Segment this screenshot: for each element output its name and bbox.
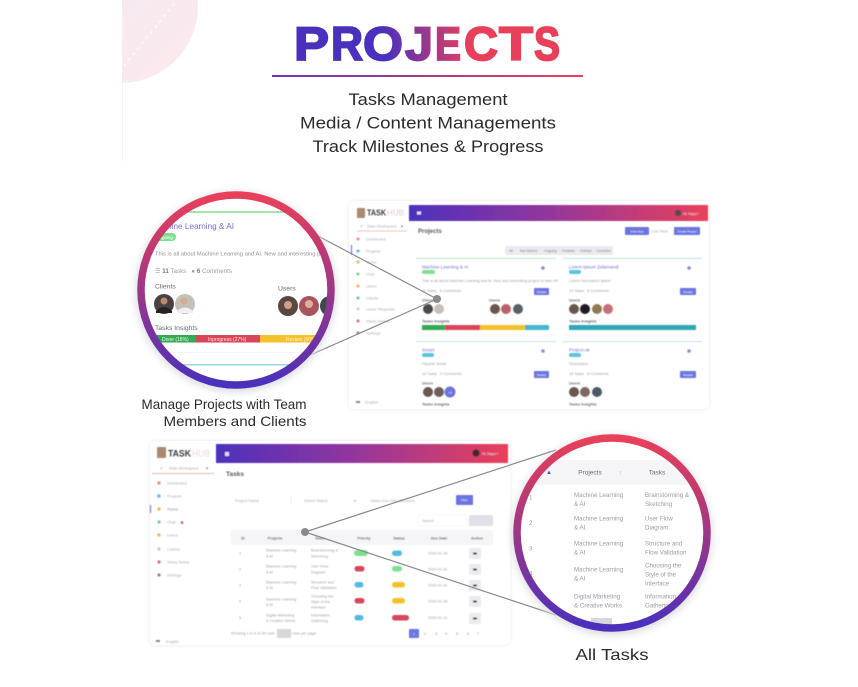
status filter tabs: Canceled (596, 249, 610, 253)
caption: manage projects: Manage Projects with Team (142, 396, 306, 412)
project card: machine learning (416, 258, 558, 336)
caption: manage projects: Members and Clients (164, 413, 306, 429)
tasks insights bar: Review (50%) (286, 337, 317, 343)
tasks table: Machine Learning (266, 548, 296, 552)
tasks sidebar: Main Workspace (169, 466, 199, 470)
project card: machine learning: 11 Tasks 6 Comments (422, 289, 461, 293)
project card: smart: Flipside Smart (422, 362, 447, 366)
tasks table: Status (393, 536, 405, 540)
project card: lorem ipsum: Lorem Description lipbon (569, 279, 611, 283)
tasks table: 3 (239, 584, 241, 588)
zoomed table header: ▲ (546, 470, 552, 476)
projects sidebar: Clients (366, 296, 378, 300)
tasks sidebar: Sticky Notes (167, 560, 189, 564)
subtitle (300, 90, 556, 156)
project card: smart: Tasks Insights (422, 402, 450, 406)
view buttons: List View (652, 228, 668, 234)
tasks table: Sketching (311, 554, 328, 558)
tasks table: & AI (266, 570, 273, 574)
project card: lorem ipsum: Tasks Insights (569, 318, 597, 324)
title: O (363, 17, 403, 70)
tasks table: & Creative Works (266, 619, 296, 623)
tasks table: Machine Learning (266, 580, 296, 584)
tasks top header bar: Hi, Nape ! (482, 452, 498, 456)
table pagination: 5 (456, 632, 458, 636)
tasks table: Priority (357, 536, 372, 540)
project card: lorem ipsum (563, 258, 702, 336)
clients group (154, 284, 195, 314)
tasks sidebar: Dashboard (167, 480, 187, 486)
tasks table: Tasks (315, 536, 325, 540)
zoomed table rows: Flow Validation (645, 550, 687, 556)
subtitle: Tasks Management (348, 90, 508, 109)
project card: lorem ipsum: Details (683, 290, 693, 294)
projects sidebar: Sticky Notes (366, 318, 388, 324)
projects page heading: Projects (418, 229, 442, 235)
projects top header bar: Hi, Naps ! (683, 212, 699, 216)
zoomed table rows: & AI (574, 550, 586, 556)
tasks sidebar: HUB (192, 448, 210, 458)
tasks table: Machine Learning (266, 598, 296, 602)
project card: machine learning: Tasks Insights (422, 318, 450, 324)
tasks insights bar: Done (18%) (162, 337, 189, 343)
tasks table (231, 530, 493, 624)
zoomed table rows: 1 (529, 494, 533, 502)
zoomed table rows: Choosing the (645, 562, 682, 570)
zoomed table header: Tasks (649, 470, 666, 476)
tasks table: 4 (239, 600, 241, 604)
table pagination: Showing 1 to 5 of 35 rows (231, 632, 275, 636)
table search and tools: Search (422, 519, 434, 523)
title: S (534, 17, 560, 70)
clients group: Clients (155, 284, 176, 290)
connector lines to magnifier: projects (308, 236, 441, 356)
task filters: Select Status (304, 498, 328, 503)
tasks sidebar: TASK (168, 448, 191, 458)
project card: project ok: Details (683, 373, 693, 377)
projects sidebar: Chat (366, 272, 375, 276)
table pagination: 7 (477, 632, 479, 636)
zoomed table header (535, 460, 689, 485)
project card: project ok (563, 341, 702, 406)
tasks table: Style of the (311, 600, 330, 604)
card title: Machine Learning & AI (152, 222, 234, 231)
zoomed table rows: Machine Learning (574, 516, 624, 522)
zoomed table rows: & AI (574, 501, 586, 508)
tasks table: Digital Marketing (266, 614, 294, 618)
tasks table: 2020-01-31 (428, 568, 447, 572)
project card: project ok: Tasks Insights (569, 402, 597, 406)
task filters: ▾ (354, 498, 356, 503)
status filter tabs: Not Started (520, 249, 537, 253)
tasks table: Information (311, 614, 330, 618)
zoomed table rows: 2 (529, 520, 533, 527)
tasks page heading: Tasks (226, 471, 244, 478)
tasks table: Interface (311, 606, 326, 610)
tasks table: & AI (266, 603, 273, 607)
zoomed table rows: Brainstorming & (645, 492, 690, 499)
tasks table: ID (241, 536, 245, 540)
users group (278, 286, 327, 316)
users group: Users (278, 286, 296, 292)
projects sidebar: HUB (387, 208, 404, 218)
table pagination: 2 (424, 632, 426, 636)
magnifier: project card detail (136, 192, 362, 392)
title: P (294, 17, 329, 70)
table pagination: 6 (467, 632, 469, 636)
project card: machine learning: This is all about Machine Learning and AI. New and interesting project to start off (422, 279, 558, 283)
zoomed table header: ↕ (619, 470, 622, 476)
project card: machine learning: Details (537, 290, 547, 294)
projects sidebar: Tasks (366, 260, 376, 264)
magnifier: project card detail: Ongoing (156, 235, 174, 240)
projects top header bar (409, 205, 708, 221)
tasks top header bar (216, 444, 508, 463)
tasks table: User Flow (311, 564, 328, 568)
status filter tabs: All (509, 249, 513, 253)
zoomed table rows: Diagram (645, 524, 668, 532)
tasks table: Diagram (311, 570, 325, 574)
zoomed table rows: Style of the (645, 572, 677, 578)
tasks table: Choosing the (311, 594, 333, 598)
task and comment counts: ☰ 11 Tasks ● 6 Comments (155, 268, 232, 275)
title underline (272, 75, 583, 77)
tasks table: Flow Validation (311, 586, 336, 590)
tasks table: Due Date (431, 536, 447, 540)
tasks sidebar (150, 447, 214, 644)
task filters: Tasks Due Date Between (370, 498, 415, 503)
projects sidebar: ✓ (360, 224, 363, 228)
projects sidebar: Users (366, 284, 376, 288)
tasks sidebar: ✓ (160, 466, 163, 470)
view buttons: Grid View (631, 230, 644, 234)
table pagination: 4 (445, 632, 447, 636)
zoomed table rows (529, 492, 690, 610)
tasks table: Brainstorming & (311, 548, 338, 552)
projects sidebar: English (365, 400, 378, 404)
zoomed table rows: Digital Marketing (574, 594, 621, 600)
title: E (435, 17, 461, 70)
caption: all tasks: All Tasks (576, 647, 648, 664)
tasks table: & AI (266, 586, 273, 590)
task filters (235, 495, 473, 505)
status filter tabs: Ongoing (544, 249, 557, 253)
project card: smart: +3 (448, 390, 452, 394)
status filter tabs (505, 246, 613, 255)
zoomed table rows: Interface (645, 580, 670, 588)
projects sidebar: ▾ (401, 224, 403, 228)
tasks sidebar: Settings (167, 572, 181, 578)
tasks table: 5 (239, 616, 241, 620)
magnifier ring (517, 438, 707, 628)
tasks sidebar: Chat (167, 520, 176, 524)
card description: This is all about Machine Learning and AI. New and interesting project to start off (155, 252, 362, 258)
status filter tabs: OnHold (580, 249, 592, 253)
tasks table: Machine Learning (266, 564, 296, 568)
tasks table: 2020-01-12 (428, 616, 447, 620)
zoomed table header: Projects (578, 470, 602, 476)
magnifier: task table detail (512, 435, 712, 635)
project card: project ok: Description (569, 362, 588, 366)
subtitle: Track Milestones & Progress (312, 137, 544, 156)
caption: manage projects (142, 396, 306, 429)
project card: project ok: Users (569, 380, 581, 386)
view buttons: Create Project (677, 230, 697, 234)
tasks insights bar (155, 326, 316, 342)
tasks insights bar: Tasks Insights (155, 325, 198, 332)
zoomed table rows: Gathering (645, 602, 673, 610)
zoomed table rows: Machine Learning (574, 566, 624, 574)
tasks sidebar: Leaves (167, 546, 180, 552)
project card: machine learning: Clients (422, 298, 436, 302)
project card: project ok: 18 Tasks 6 Comments (569, 372, 609, 376)
zoomed table rows: & Creative Works (574, 602, 622, 610)
project card: smart: Details (537, 373, 547, 377)
tasks table: 2 (239, 568, 241, 572)
zoomed table rows: Sketching (645, 501, 673, 508)
zoomed table rows: User Flow (645, 516, 673, 522)
projects sidebar: Projects (366, 248, 380, 254)
title: C (464, 17, 498, 70)
magnifier ring (141, 195, 331, 385)
zoomed table rows: & AI (574, 576, 586, 582)
tasks table: Action (471, 536, 484, 540)
status badge (159, 233, 176, 241)
projects sidebar (351, 208, 407, 404)
tasks table: 1 (239, 552, 241, 556)
subtitle: Media / Content Managements (300, 114, 556, 132)
zoomed table rows: Structure and (645, 540, 683, 548)
screenshot: projects page (349, 201, 709, 409)
tasks table: & AI (266, 554, 273, 558)
project card: machine learning: Users (489, 298, 501, 302)
project card: project ok: Project-ok (569, 348, 590, 352)
task filters: Project Name (235, 498, 260, 503)
title: R (331, 17, 363, 70)
tasks sidebar: Tasks (167, 506, 179, 512)
zoomed table rows: 4 (529, 570, 533, 578)
projects sidebar: Dashboard (366, 236, 386, 242)
title: T (499, 17, 533, 70)
tasks sidebar: Users (167, 532, 177, 538)
project card: smart: Smart (422, 348, 435, 352)
zoomed table rows: Machine Learning (574, 540, 624, 548)
projects sidebar: Settings (366, 330, 380, 336)
project card: smart (416, 341, 556, 406)
projects sidebar: TASK (367, 208, 386, 218)
projects sidebar: Main Workspace (367, 224, 397, 228)
project card: smart: Users (422, 380, 434, 386)
zoomed table rows: Machine Learning (574, 492, 624, 499)
tasks sidebar: Projects (167, 494, 181, 498)
tasks table: 2020-01-26 (428, 552, 447, 556)
tasks sidebar: English (166, 639, 179, 644)
task filters: Filter (461, 498, 468, 502)
project card: smart: 18 Tasks 0 Comments (422, 372, 462, 376)
table pagination (231, 629, 479, 638)
table pagination: 3 (435, 632, 437, 636)
zoomed table rows: Information (645, 594, 677, 600)
tasks table: Structure and (311, 580, 334, 584)
zoomed table rows: 3 (529, 546, 533, 552)
table pagination: rows per page (292, 632, 316, 636)
status filter tabs: Finished (562, 249, 575, 253)
project card: machine learning: Machine Learning & AI (422, 264, 468, 270)
tasks table: Gathering (311, 619, 328, 623)
tasks sidebar: ▾ (206, 466, 208, 470)
connector lines to magnifier: tasks (301, 450, 556, 615)
title (294, 17, 560, 70)
tasks table: Projects (268, 536, 282, 540)
screenshot: tasks page (150, 441, 510, 645)
tasks table: 2020-01-28 (428, 600, 447, 604)
background decorative circle (122, 0, 198, 83)
table pagination: 1 (413, 632, 415, 636)
projects sidebar: Leave Requests (366, 306, 395, 312)
tasks table: 2020-01-31 (428, 584, 447, 588)
project card: lorem ipsum: Users (569, 298, 581, 302)
view buttons (625, 227, 700, 235)
project card: lorem ipsum: 13 Tasks 8 Comments (569, 289, 609, 293)
table search and tools (418, 515, 493, 526)
project card: lorem ipsum: Lorem Ipsum Zalamandi (569, 264, 619, 270)
tasks insights bar: Inprogress (27%) (208, 337, 247, 343)
zoomed table rows: & AI (574, 524, 586, 532)
title: J (405, 17, 433, 70)
